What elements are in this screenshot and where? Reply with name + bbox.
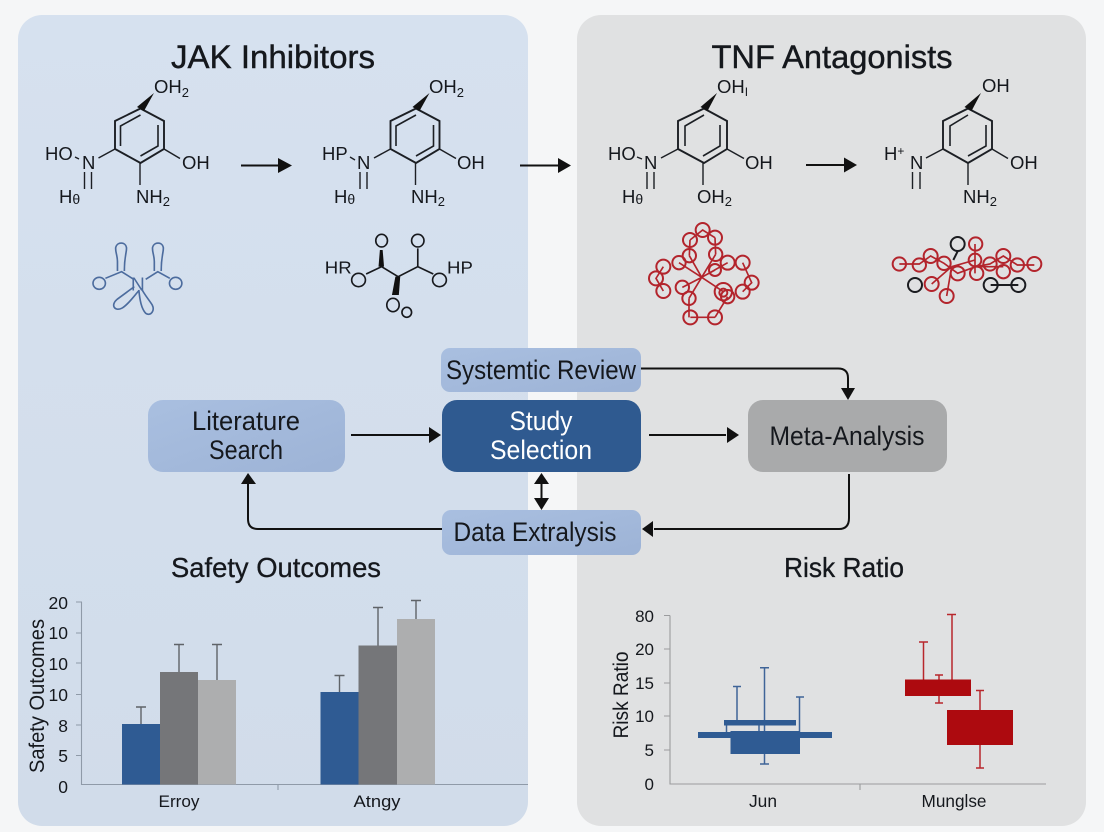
axis title: Safety Outcomes: Safety Outcomes: [26, 619, 49, 773]
flow box: Systematic Review: Systemtic Review: [446, 355, 637, 385]
molecule 4: +: [897, 144, 904, 158]
molecule 3: OH: [697, 186, 725, 207]
molecule 1: OH: [154, 76, 182, 97]
box plot: risk ratio: 10: [635, 707, 654, 726]
molecule 1: HO: [45, 143, 73, 164]
flow box: Study Selection: Selection: [490, 435, 592, 465]
molecule 2: [322, 76, 485, 209]
molecule 3: θ: [635, 191, 643, 207]
black tartrate-like molecule: [325, 234, 473, 317]
molecule 2: 2: [438, 194, 445, 209]
box plot: risk ratio: 0: [645, 775, 654, 794]
flow box: Meta-Analysis: Meta-Analysis: [770, 421, 924, 451]
panel: TNF antagonists background: [577, 15, 1086, 826]
heading: JAK Inhibitors: JAK Inhibitors: [171, 39, 375, 75]
arrow: molecule 1 to 2: [241, 158, 292, 173]
molecule 4: [884, 75, 1038, 209]
molecule 1: H: [59, 186, 72, 207]
molecule 3: I: [745, 85, 748, 99]
red ring network molecule left: [649, 223, 759, 324]
bar chart: safety outcomes: Atngy: [354, 792, 401, 811]
molecule 4: N: [910, 152, 923, 173]
flow box: Literature Search: Literature: [192, 406, 300, 436]
molecule 3: OH: [745, 152, 773, 173]
molecule 4: NH: [963, 186, 990, 207]
molecule 3: OH: [717, 76, 745, 97]
molecule 1: 2: [182, 85, 189, 100]
bar chart: safety outcomes: 0: [58, 777, 68, 797]
molecule 3: [608, 76, 773, 209]
blue ball-and-stick molecule: N: [131, 275, 145, 296]
molecule 2: N: [357, 152, 370, 173]
molecule 2: OH: [457, 152, 485, 173]
axis title: Risk Ratio: Risk Ratio: [610, 652, 633, 738]
molecule 4: H: [884, 143, 897, 164]
molecule 4: 2: [990, 194, 997, 209]
box plot: risk ratio: 80: [635, 607, 654, 626]
box plot: risk ratio: Munglse: [922, 791, 986, 811]
heading: Safety Outcomes: Safety Outcomes: [171, 552, 381, 583]
bar chart: safety outcomes: 10: [49, 623, 68, 643]
bar chart: safety outcomes: 8: [58, 716, 68, 736]
arrow: molecule 3 to 4: [806, 158, 857, 172]
heading: TNF Antagonists: TNF Antagonists: [712, 39, 952, 75]
red and black ring network molecule right: [893, 237, 1041, 303]
flow box: Literature Search: Search: [209, 435, 283, 465]
molecule 2: θ: [347, 191, 355, 207]
molecule 1: N: [82, 152, 95, 173]
bar chart: safety outcomes: 5: [58, 746, 68, 766]
molecule 1: [45, 76, 210, 209]
molecule 2: H: [334, 186, 347, 207]
bar chart: safety outcomes: 10: [49, 685, 68, 705]
flow box: Systematic Review: [441, 348, 641, 392]
panel: JAK inhibitors background: [18, 15, 528, 826]
flow box: Data Extralysis: [442, 510, 641, 555]
box plot: risk ratio: 5: [645, 741, 654, 760]
bar chart: safety outcomes: [26, 593, 528, 811]
bar chart: safety outcomes: 20: [49, 593, 68, 613]
flow box: Meta-Analysis: [748, 400, 947, 472]
molecule 2: HP: [322, 143, 348, 164]
flow box: Study Selection: Study: [510, 406, 573, 436]
bar chart: safety outcomes: 10: [49, 654, 68, 674]
molecule 4: OH: [982, 75, 1010, 96]
bar chart: safety outcomes: Erroy: [158, 792, 200, 811]
molecule 3: H: [622, 186, 635, 207]
molecule 2: OH: [429, 76, 457, 97]
black tartrate-like molecule: HP: [447, 257, 473, 277]
molecule 2: 2: [457, 85, 464, 100]
molecule 3: N: [644, 152, 657, 173]
arrow: molecule 2 to 3: [520, 158, 571, 173]
box plot: risk ratio: 20: [635, 640, 654, 659]
flow connectors and arrows: [241, 368, 855, 537]
box plot: risk ratio: 15: [635, 674, 654, 693]
box plot: risk ratio: [610, 607, 1046, 811]
flow box: Literature Search: [148, 400, 345, 472]
box plot: risk ratio: Jun: [749, 791, 777, 811]
heading: Risk Ratio: Risk Ratio: [784, 552, 904, 583]
black tartrate-like molecule: HR: [325, 257, 352, 277]
molecule 3: HO: [608, 143, 636, 164]
molecule 1: θ: [72, 191, 80, 207]
molecule 4: OH: [1010, 152, 1038, 173]
molecule 1: 2: [163, 194, 170, 209]
molecule 2: NH: [411, 186, 438, 207]
flow box: Data Extralysis: Data Extralysis: [454, 517, 616, 547]
blue ball-and-stick molecule: [93, 243, 182, 314]
molecule 1: NH: [136, 186, 163, 207]
molecule 1: OH: [182, 152, 210, 173]
molecule 3: 2: [725, 194, 732, 209]
flow box: Study Selection: [442, 400, 641, 472]
